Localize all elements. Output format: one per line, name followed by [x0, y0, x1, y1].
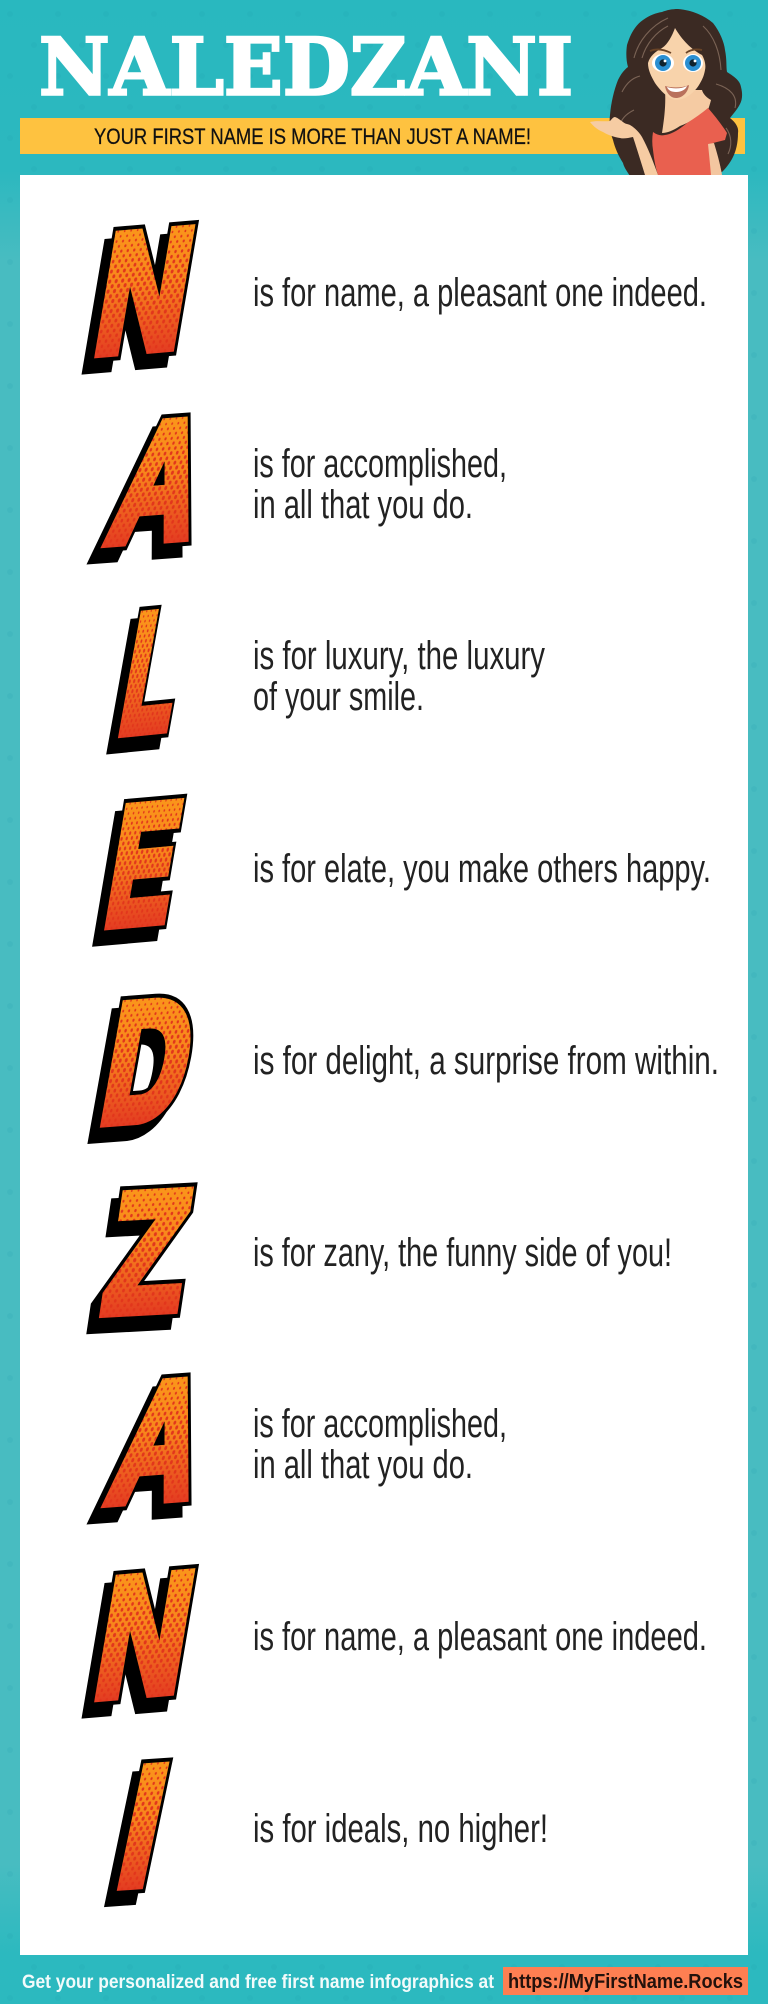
text: A meaning: in all that you do. [253, 483, 473, 527]
face [648, 28, 705, 100]
letter Z: Z [95, 1156, 200, 1348]
letter A: A [87, 397, 215, 591]
letter A: A [96, 1345, 224, 1539]
footer [22, 1967, 748, 1995]
letter N: N [85, 194, 204, 389]
text: A meaning [253, 1402, 507, 1487]
letter Z: Z [95, 1156, 200, 1348]
title: NALEDZANI [39, 20, 573, 114]
letter D: D [91, 964, 206, 1158]
text: I meaning: is for ideals, no higher! [253, 1807, 548, 1851]
letter N: N [76, 206, 195, 401]
text: A meaning: is for accomplished, [253, 442, 507, 486]
letter E: E [87, 781, 183, 973]
letter L: L [110, 575, 195, 769]
text: L meaning [253, 634, 545, 719]
url badge: https://MyFirstName.Rocks [508, 1970, 743, 1993]
text: A meaning [253, 442, 507, 527]
letter I: I [107, 1731, 180, 1921]
letter N: N [85, 194, 204, 389]
footer text: Get your personalized and free first name infographics at [22, 1971, 494, 1993]
banner text: YOUR FIRST NAME IS MORE THAN JUST A NAME! [94, 124, 531, 149]
letter A: A [96, 385, 224, 579]
letter I: I [107, 1731, 180, 1921]
letter N: N [85, 1538, 204, 1733]
letter N: N [76, 1550, 195, 1745]
mouth [665, 85, 689, 98]
letter A: A [87, 1357, 215, 1551]
banner [20, 118, 745, 154]
letter L: L [110, 575, 195, 769]
icon: cartoon woman [590, 9, 742, 176]
shirt [652, 108, 727, 175]
letter A: A [96, 1345, 224, 1539]
neck [662, 90, 711, 133]
eyes [650, 49, 703, 72]
letter I: I [98, 1743, 171, 1933]
letter E: E [96, 769, 192, 961]
letter Z: Z [86, 1168, 191, 1360]
letter N: N [85, 1538, 204, 1733]
letter D: D [82, 976, 197, 1170]
text: L meaning: of your smile. [253, 675, 424, 719]
letter A: A [96, 385, 224, 579]
text: A meaning: in all that you do. [253, 1443, 473, 1487]
letter L: L [101, 587, 186, 781]
letter E: E [96, 769, 192, 961]
text: L meaning: is for luxury, the luxury [253, 634, 545, 678]
left arm and hand [590, 117, 658, 175]
text: A meaning: is for accomplished, [253, 1402, 507, 1446]
letter D: D [91, 964, 206, 1158]
right arm [708, 143, 722, 175]
